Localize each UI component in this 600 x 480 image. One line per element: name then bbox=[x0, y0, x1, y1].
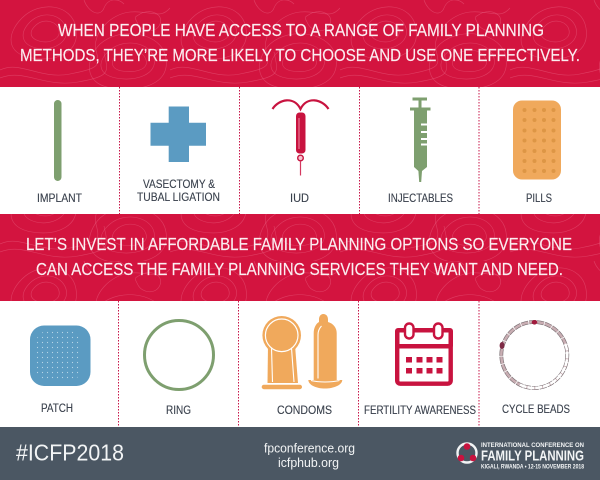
method: vasectomy and tubal ligation bbox=[137, 106, 220, 204]
icon: vaginal ring bbox=[144, 320, 214, 390]
method: ring bbox=[144, 320, 214, 417]
label: vasectomy and tubal ligation: VASECTOMY & bbox=[143, 179, 215, 191]
method: injectables bbox=[388, 98, 453, 205]
icon: pill pack bbox=[513, 100, 561, 180]
website links: icfphub.org bbox=[278, 455, 339, 470]
label: vasectomy and tubal ligation bbox=[137, 179, 220, 204]
icon: condoms bbox=[262, 314, 342, 389]
label: vasectomy and tubal ligation: TUBAL LIGATION bbox=[137, 192, 220, 204]
icon: syringe bbox=[410, 98, 430, 182]
website links: fpconference.org bbox=[264, 441, 355, 456]
icon: IUD bbox=[272, 100, 328, 176]
icon: medical cross bbox=[150, 106, 206, 162]
heading: investment statement bbox=[26, 234, 572, 279]
method: IUD bbox=[272, 100, 328, 205]
heading: top statement bbox=[20, 20, 580, 65]
method: pills bbox=[513, 100, 561, 205]
label: pills: PILLS bbox=[526, 193, 552, 205]
logo: conference mark bbox=[458, 443, 476, 462]
panel: middle red banner bbox=[0, 214, 600, 301]
icon: patch bbox=[30, 326, 90, 386]
method: patch bbox=[30, 326, 90, 415]
method: fertility awareness bbox=[364, 324, 476, 417]
label: patch: PATCH bbox=[41, 403, 73, 415]
method: cycle beads bbox=[500, 320, 570, 416]
logo: conference name bbox=[481, 442, 584, 470]
icon: cycle beads necklace bbox=[500, 320, 567, 388]
website links bbox=[264, 441, 355, 470]
label: injectables: INJECTABLES bbox=[388, 193, 453, 205]
label: IUD: IUD bbox=[290, 193, 309, 205]
panel: footer bar bbox=[0, 427, 600, 480]
heading: top statement: WHEN PEOPLE HAVE ACCESS TO A RANGE OF FAMILY PLANNING bbox=[58, 20, 544, 40]
label: fertility awareness: FERTILITY AWARENESS bbox=[364, 405, 476, 417]
method: condoms bbox=[262, 314, 342, 417]
panel: top red banner bbox=[0, 0, 600, 87]
icon: calendar bbox=[395, 324, 453, 384]
label: ring: RING bbox=[166, 405, 191, 417]
logo: conference name: INTERNATIONAL CONFERENCE ON bbox=[481, 442, 584, 449]
icon: implant rod bbox=[54, 100, 62, 181]
label: condoms: CONDOMS bbox=[277, 405, 332, 417]
method: implant bbox=[37, 100, 82, 205]
label: cycle beads: CYCLE BEADS bbox=[502, 404, 570, 416]
label: implant: IMPLANT bbox=[37, 193, 82, 205]
hashtag: #ICFP2018 bbox=[16, 440, 124, 466]
